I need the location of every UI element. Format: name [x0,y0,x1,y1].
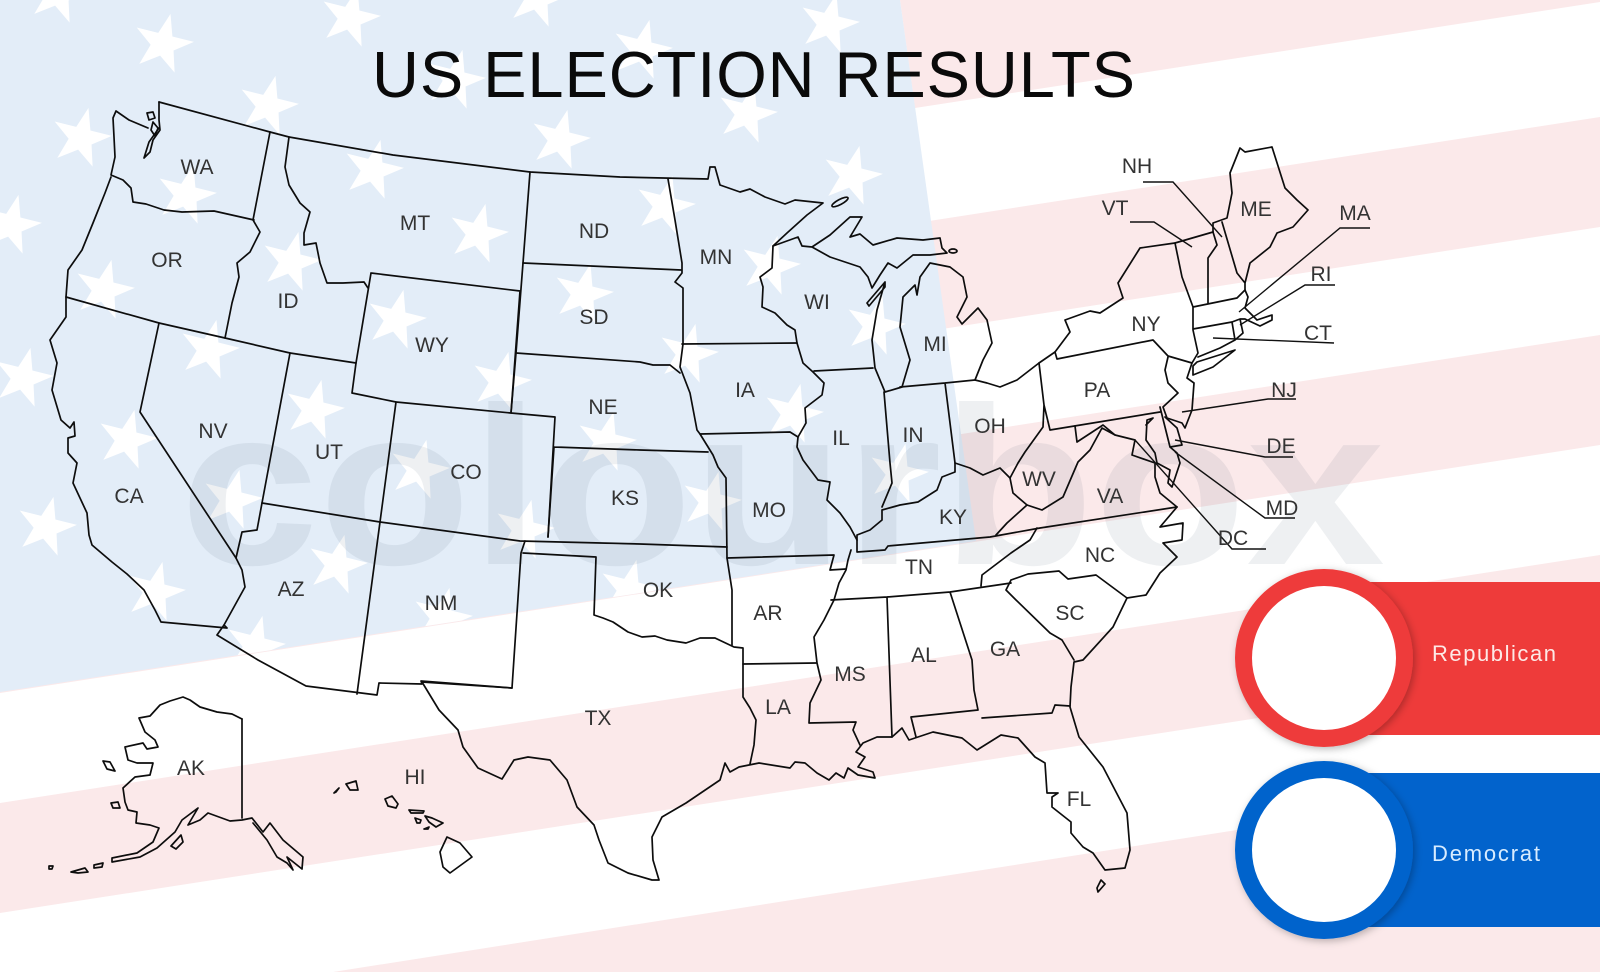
map: state labels: FL [1067,788,1091,811]
map: state labels: TN [905,556,933,579]
map: state labels: NC [1085,544,1115,567]
map: state labels: AZ [278,578,305,601]
map: state labels: AR [753,602,783,625]
map: state labels: SD [579,306,609,329]
map: state labels: NM [425,592,457,615]
map: leader lines [1130,182,1370,549]
map: state labels: DC [1218,527,1248,550]
map: state labels: UT [315,441,343,464]
map: state labels: NV [198,420,228,443]
map: state labels: PA [1084,379,1110,402]
map: state labels: CO [450,461,482,484]
map: state labels: NE [588,396,618,419]
map: state labels: DE [1266,435,1296,458]
map: Alaska and Hawaii [49,697,472,873]
legend: Republican: Republican [1432,641,1556,666]
map: state labels: GA [990,638,1020,661]
map: state labels: KY [939,506,967,529]
map: state labels: OR [151,249,183,272]
map: state labels: IA [735,379,755,402]
map: state labels: TX [585,707,611,730]
map: state borders [50,102,1308,892]
map: state labels: RI [1310,263,1332,286]
map: state labels: MO [752,499,786,522]
map: state labels: SC [1055,602,1085,625]
legend: Democrat [1235,761,1600,939]
map: state labels: MN [700,246,732,269]
map: state labels: AK [177,757,205,780]
map: state labels: CA [114,485,144,508]
legend: Democrat: Democrat [1432,841,1540,866]
map: state labels: OK [643,579,673,602]
map: state labels: LA [765,696,791,719]
map: state labels: HI [404,766,426,789]
map: state labels: CT [1304,322,1332,345]
background: flag canton with stars [0,0,976,692]
map: state labels: ID [278,290,298,313]
map: state labels: NH [1122,155,1152,178]
map: state labels: NJ [1271,379,1297,402]
map: state labels: VA [1097,485,1123,508]
title: US ELECTION RESULTS [372,38,1135,111]
map: state labels: ND [579,220,609,243]
map: state labels: MD [1266,497,1298,520]
map: state labels: WA [180,156,214,179]
map: state labels: IL [832,427,850,450]
map: state labels: VT [1102,197,1129,220]
watermark: colourbox [180,360,1385,612]
map: state labels: KS [611,487,639,510]
map: state labels: MI [923,333,947,356]
map: state labels: AL [911,644,937,667]
map: state labels: ME [1240,198,1272,221]
map: state labels: MT [400,212,430,235]
map: state labels: NY [1131,313,1161,336]
map: state labels: OH [974,415,1006,438]
map: state labels: WV [1022,468,1056,491]
map: state labels [114,155,1371,811]
map: state labels: MA [1339,202,1371,225]
map: state labels: WI [804,291,830,314]
map: state labels: MS [834,663,866,686]
legend: Republican [1235,569,1600,747]
map: state labels: IN [902,424,924,447]
map: state labels: WY [415,334,449,357]
